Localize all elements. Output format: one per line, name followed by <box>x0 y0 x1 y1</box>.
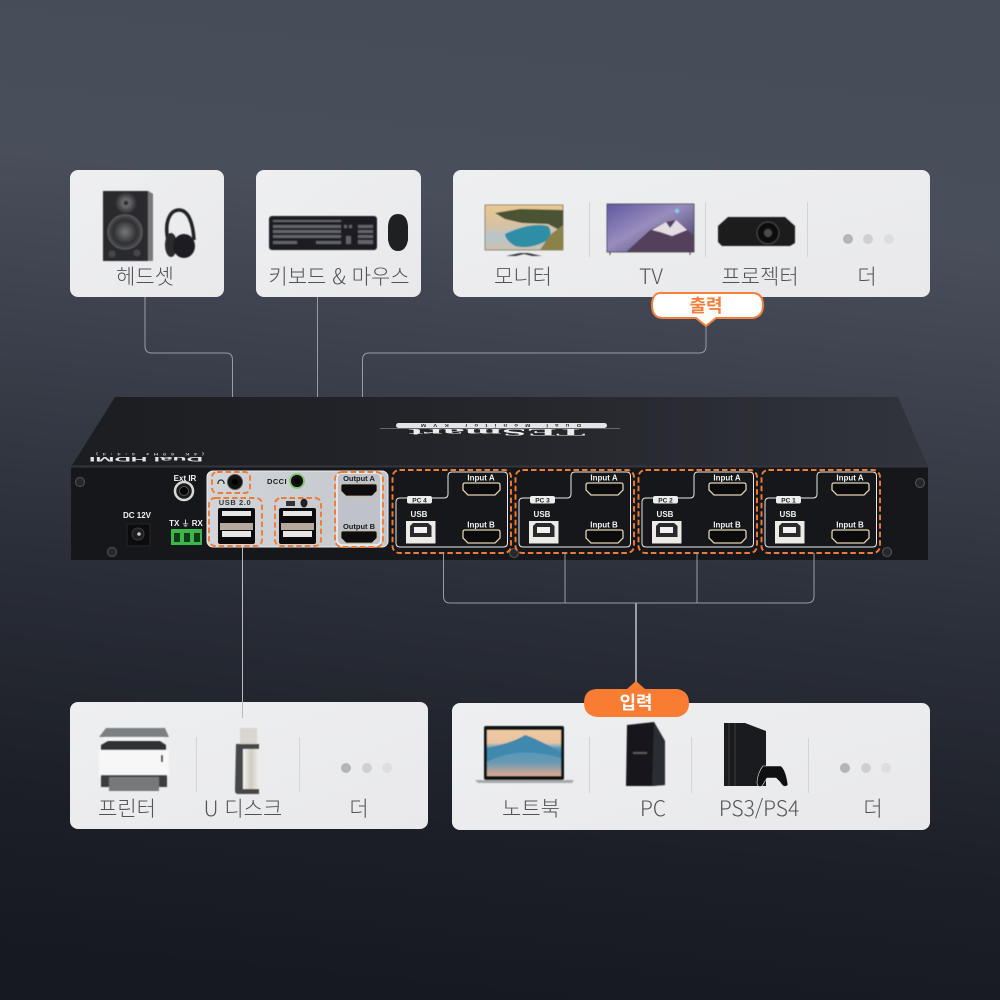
input group: PC 2 <box>638 470 757 553</box>
callout: input <box>584 681 689 717</box>
input group: PC 4: Input B <box>467 520 495 530</box>
icon: game console <box>724 723 788 786</box>
callout: input: 입력 <box>619 693 653 713</box>
Ext IR jack <box>174 474 197 500</box>
output B port <box>341 522 377 543</box>
connector: input trunk line <box>635 603 637 690</box>
USB 2.0 ports: USB 2.0 <box>219 498 251 507</box>
audio jack <box>218 474 242 490</box>
label: TV: TV <box>639 261 663 291</box>
divider <box>588 737 590 793</box>
icon: monitor <box>485 205 563 256</box>
divider <box>808 738 810 793</box>
orange dashed port highlights <box>209 472 383 547</box>
screws <box>76 478 924 558</box>
input group: PC 3: PC 3 <box>535 498 550 504</box>
icon: USB drive <box>235 728 259 794</box>
DC 12V port: DC 12V <box>123 511 152 520</box>
input group: PC 4: Input A <box>467 474 495 482</box>
label: projector: 프로젝터 <box>721 261 799 291</box>
output B port: Output B <box>343 522 376 531</box>
callout: output: 출력 <box>689 296 723 316</box>
output A port <box>341 474 377 496</box>
label: keyboard and mouse: 키보드 & 마우스 <box>268 261 410 291</box>
icon: TV <box>607 204 694 255</box>
DCCI jack <box>267 474 304 488</box>
input group: PC 3 <box>516 470 634 553</box>
input group: PC 3: USB <box>534 510 551 519</box>
input group: PC 4: USB <box>411 510 428 519</box>
icon: more dots <box>843 234 894 244</box>
printed model name <box>89 452 204 463</box>
label: USB disk: U 디스크 <box>204 793 282 823</box>
connector: output line <box>362 322 706 470</box>
printed brand logo <box>380 422 620 436</box>
label: more: 더 <box>349 793 369 823</box>
input group: PC 4: PC 4 <box>412 498 427 504</box>
printed brand logo: TESmart <box>408 427 586 436</box>
icon: projector <box>718 217 795 246</box>
divider <box>298 737 300 792</box>
input group: PC 2: Input B <box>713 520 741 530</box>
device top face <box>71 397 928 467</box>
label: more: 더 <box>863 793 883 823</box>
label: monitor: 모니터 <box>494 261 552 291</box>
TX RX terminal <box>169 519 204 545</box>
divider <box>704 202 706 257</box>
printed brand logo: Dual Monitor KVM <box>421 422 581 427</box>
icon: more dots <box>840 763 891 773</box>
DCCI jack: DCCI <box>267 477 287 486</box>
label: PC: PC <box>640 793 666 823</box>
connector: headphone line <box>145 297 232 472</box>
icon: speaker <box>103 191 153 261</box>
input group: PC 3: Input B <box>590 520 618 530</box>
label: printer: 프린터 <box>98 793 156 823</box>
label: laptop: 노트북 <box>502 793 560 823</box>
icon: more dots <box>341 763 392 773</box>
input group: PC 2: PC 2 <box>658 498 673 504</box>
panel: USB peripherals <box>70 547 428 829</box>
input group: PC 3: Input A <box>590 474 618 482</box>
input group: PC 1 <box>762 470 880 553</box>
divider <box>690 737 692 793</box>
KVM switch device <box>71 397 928 560</box>
label: PS3/PS4: PS3/PS4 <box>719 793 799 823</box>
output A port: Output A <box>343 474 375 483</box>
input group: PC 1: Input A <box>836 474 864 482</box>
panel: headphones <box>70 170 224 297</box>
label: headset: 헤드셋 <box>116 261 174 291</box>
panel: keyboard and mouse <box>256 170 421 297</box>
silver port plate <box>207 471 388 547</box>
callout: output <box>652 293 763 326</box>
divider <box>806 202 808 257</box>
input group: PC 2: USB <box>657 510 674 519</box>
input group: PC 4 <box>392 470 511 553</box>
icon: PC tower <box>626 722 665 786</box>
device front face <box>71 466 928 560</box>
connector end: USB line inside panel <box>242 547 244 718</box>
icon: headphones <box>165 210 195 258</box>
input group: PC 1: Input B <box>836 520 864 530</box>
Ext IR jack: Ext IR <box>174 474 197 483</box>
icon: controller <box>757 766 788 786</box>
panel: output devices <box>453 170 930 297</box>
input group: PC 1: USB <box>780 510 797 519</box>
printed model name: Dual HDMI <box>89 456 203 463</box>
icon: laptop <box>475 726 574 783</box>
USB 2.0 ports <box>218 498 255 544</box>
TX RX terminal: TX ⏚ RX <box>169 519 204 528</box>
input group: PC 2: Input A <box>713 474 741 482</box>
output HDMI frame <box>337 473 381 545</box>
divider <box>588 202 590 257</box>
label: more: 더 <box>857 261 877 291</box>
panel: input devices <box>452 703 930 830</box>
connector: input bracket lines <box>444 553 814 603</box>
icon: mouse <box>388 214 408 251</box>
DC 12V port <box>123 511 152 546</box>
connector: keyboard and mouse line <box>316 297 318 498</box>
printed model name: (4K 60Hz 4:4:4) <box>96 452 204 456</box>
input group: PC 1: PC 1 <box>781 498 796 504</box>
icon: keyboard <box>269 216 377 250</box>
divider <box>196 737 198 792</box>
keyboard and mouse USB ports <box>279 498 316 544</box>
icon: printer <box>99 728 169 791</box>
